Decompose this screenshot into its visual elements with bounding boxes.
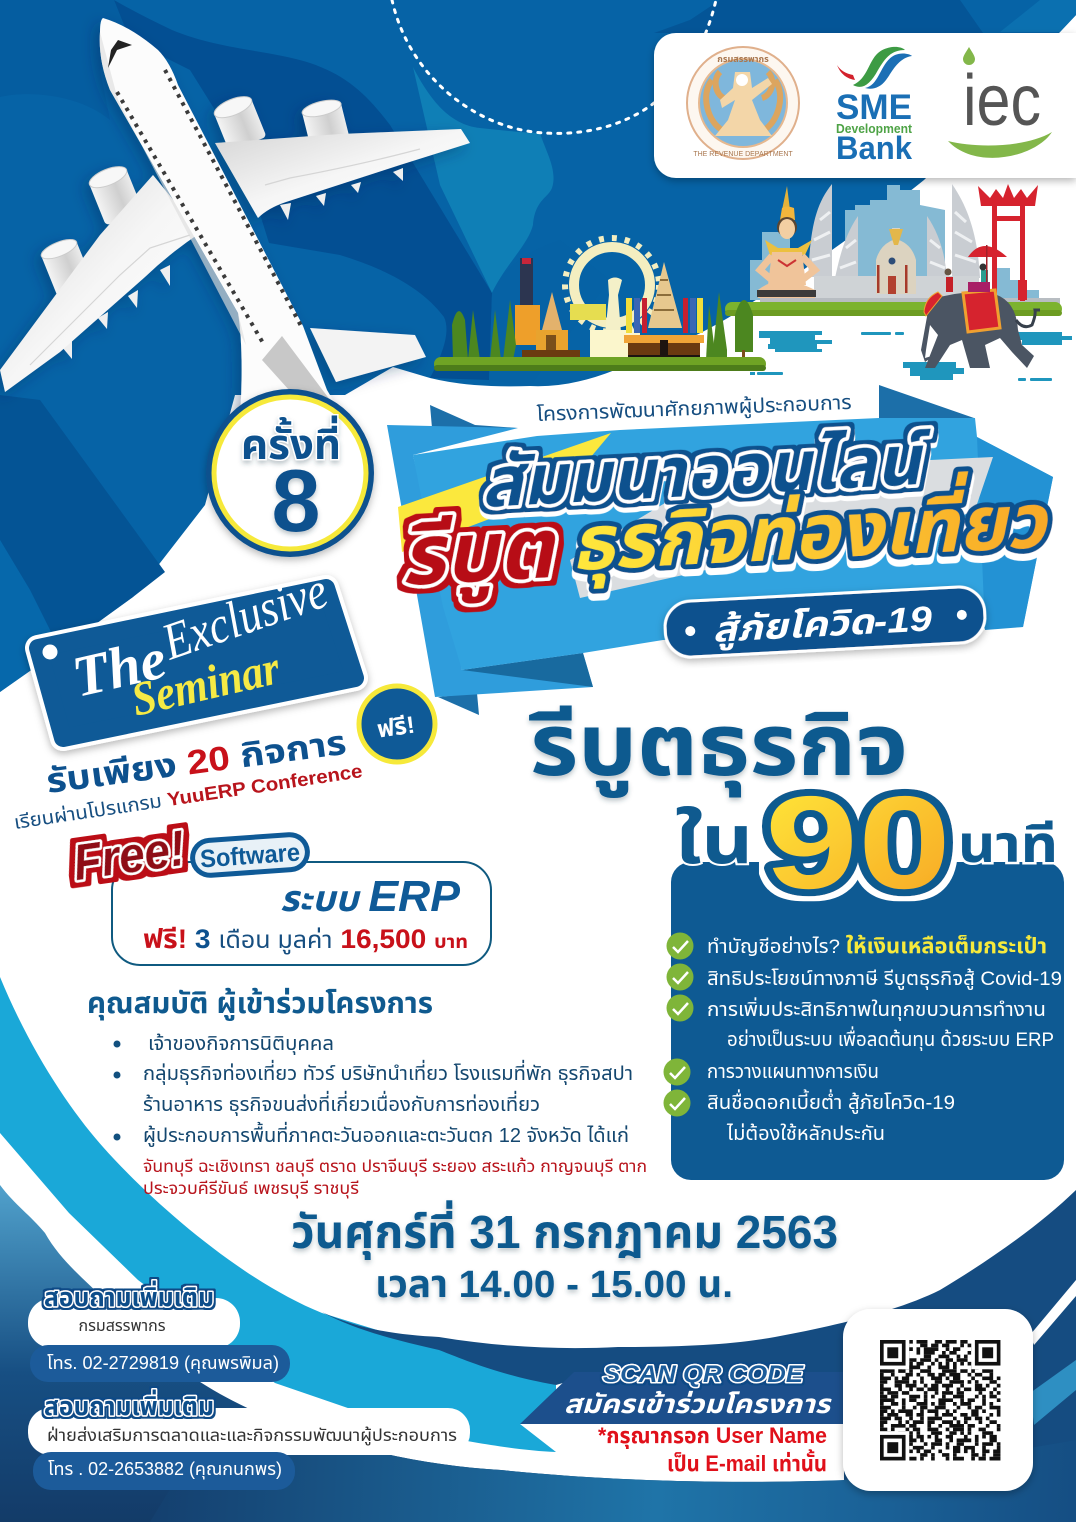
contact block: marketing division: ฝ่ายส่งเสริมการตลาดและและกิจกรรมพัฒนาผู้ประกอบการ [47,1425,457,1447]
logo: SME Development Bank: Bank [836,130,912,166]
limited seats heading: รับเพียง 20 กิจการ [44,724,348,801]
engines [39,92,350,297]
skyline buildings [845,185,945,300]
democracy monument [760,184,1060,304]
giant swing [978,184,1038,301]
windows [117,70,301,343]
badge: session 8: ครั้งที่ [241,415,341,468]
tag: the exclusive seminar: Seminar [127,641,286,727]
logo: revenue department seal [687,47,799,159]
pill: fight covid-19 [664,586,986,658]
right topics panel [664,862,1064,1180]
water pools [750,331,1072,381]
sticker: software [189,831,311,879]
QR finder patterns [880,1340,1000,1460]
title line 2: red reboot: รีบูต [398,501,560,608]
province list: ประจวบคีรีขันธ์ เพชรบุรี ราชบุรี [143,1179,359,1199]
topics text: ทำบัญชีอย่างไร? ให้เงินเหลือเต็มกระเป๋า [707,935,1047,958]
box: free ERP software: ฟรี! 3 เดือน มูลค่า 16,500 บาท [143,924,468,955]
headline number: 90: 90 [765,769,951,916]
badge: session 8: 8 [272,451,320,550]
conference note: เรียนผ่านโปรแกรม YuuERP Conference [12,759,364,834]
right ground [725,302,1062,316]
box: free ERP software [112,862,491,965]
ribbon small dark fold [438,693,479,715]
headline word: in: ใน [675,802,753,878]
sticker: software: Software [199,839,301,873]
left ground [434,357,766,371]
check icons [664,932,694,1116]
topics text: การเพิ่มประสิทธิภาพในทุกขบวนการทำงาน [707,997,1046,1021]
background: top blue sky with swooshes [0,0,1076,692]
badge: free: ฟรี! [375,711,416,744]
left temples [515,258,580,359]
QR code card [843,1309,1033,1491]
badge: free [359,686,435,762]
dotted flight path [392,0,716,133]
qualifications heading: คุณสมบัติ ผู้เข้าร่วมโครงการ [87,988,433,1021]
province list [143,1156,647,1199]
contact block: marketing division: โทร . 02-2653882 (คุณกนกพร) [48,1459,282,1480]
qualification lines: เจ้าของกิจการนิติบุคคล [148,1032,334,1055]
event time: เวลา 14.00 - 15.00 น. [375,1264,733,1306]
logo: revenue department seal: กรมสรรพากร [717,54,769,64]
trees [452,292,753,360]
cockpit [108,40,132,68]
small project heading: โครงการพัฒนาศักยภาพผู้ประกอบการ [536,391,852,427]
logo panel [654,33,1076,178]
ribbon wedge [462,653,593,687]
logo: iec: iec [963,61,1041,141]
contact block: marketing division [28,1390,470,1490]
wings [0,129,470,392]
contact block: revenue department: โทร. 02-2729819 (คุณพรพิมล) [47,1353,279,1374]
topics text [707,935,1062,1145]
topics text: สินชื่อดอกเบี้ยต่ำ สู้ภัยโควิด-19 [707,1089,955,1115]
city skyline illustration right [725,184,1072,381]
province list: จันทบุรี ฉะเชิงเทรา ชลบุรี ตราด ปราจีนบุรี ระยอง สระแก้ว กาญจนบุรี ตาก [143,1156,647,1177]
headline: reboot business in 90 minutes [528,698,1058,916]
qualification lines: ผู้ประกอบการพื้นที่ภาคตะวันออกและตะวันตก 12 จังหวัด ได้แก่ [143,1121,629,1148]
tag: the exclusive seminar [38,562,355,738]
logo: SME Development Bank [836,47,913,166]
wing pylons [62,168,403,359]
logo: iec [948,47,1052,158]
banner ribbon [387,385,1053,715]
box: free ERP software: ระบบ ERP [280,872,461,921]
qualifications block [87,988,647,1199]
title line 1: online seminar: สัมมนาออนไลน์ [479,420,935,522]
pill: fight covid-19: สู้ภัยโควิด-19 [711,599,934,652]
qualification lines [143,1032,633,1148]
contact block: revenue department: กรมสรรพากร [78,1318,166,1335]
topics text: การวางแผนทางการเงิน [707,1061,879,1083]
topics text: อย่างเป็นระบบ เพื่อลดต้นทุน ด้วยระบบ ERP [727,1026,1054,1051]
ribbon lower band [387,425,593,697]
topics text: สิทธิประโยชน์ทางภาษี รีบูตธุรกิจสู้ Covid-19 [707,967,1062,991]
tag: the exclusive seminar: Exclusive [155,562,335,672]
QR call to action: เป็น E-mail เท่านั้น [667,1449,827,1476]
QR call to action: SCAN QR CODE [603,1361,804,1388]
qualification lines: ร้านอาหาร ธุรกิจขนส่งที่เกี่ยวเนื่องกับการท่องเที่ยว [143,1090,540,1116]
topics text: ไม่ต้องใช้หลักประกัน [726,1122,885,1145]
logo: SME Development Bank: SME [836,88,912,127]
logo: SME Development Bank: Development [836,122,913,136]
event date: วันศุกร์ที่ 31 กรกฎาคม 2563 [291,1200,838,1260]
qualification lines: กลุ่มธุรกิจท่องเที่ยว ทัวร์ บริษัทนำเที่ยว โรงแรมที่พัก ธุรกิจสปา [143,1059,633,1085]
QR call to action: สมัครเข้าร่วมโครงการ [564,1389,832,1419]
QR call to action [520,1361,844,1481]
badge: session 8 [206,389,374,557]
headline line 1: รีบูตธุรกิจ [528,698,908,798]
fuselage [100,18,345,420]
airplane [0,18,470,420]
background: lower swooshes [0,977,1076,1522]
temple landscape illustration left [434,238,766,371]
tag: the exclusive seminar: The [66,625,172,710]
seated deity statue [757,186,816,298]
main temple with banners [624,262,704,360]
headline word: minutes: นาที [958,816,1058,874]
sticker: free: Free! [70,820,188,891]
title line 2: yellow tourism: ธุรกิจท่องเที่ยว [568,467,1051,590]
yellow accent [398,433,611,552]
QR call to action: *กรุณากรอก User Name [598,1423,827,1449]
contact block: revenue department: สอบถามเพิ่มเติม [44,1281,214,1312]
contact block: marketing division: สอบถามเพิ่มเติม [44,1390,214,1421]
ribbon main band [413,418,1053,670]
ribbon back flaps [430,405,518,428]
elephant with riders [921,245,1040,368]
logo: revenue department seal: THE REVENUE DEPARTMENT [693,151,793,158]
grey shadow band [570,457,993,598]
contact block: revenue department [28,1281,290,1382]
tailplanes [241,328,426,397]
ferris wheel [565,238,659,357]
bullets [114,1040,120,1140]
